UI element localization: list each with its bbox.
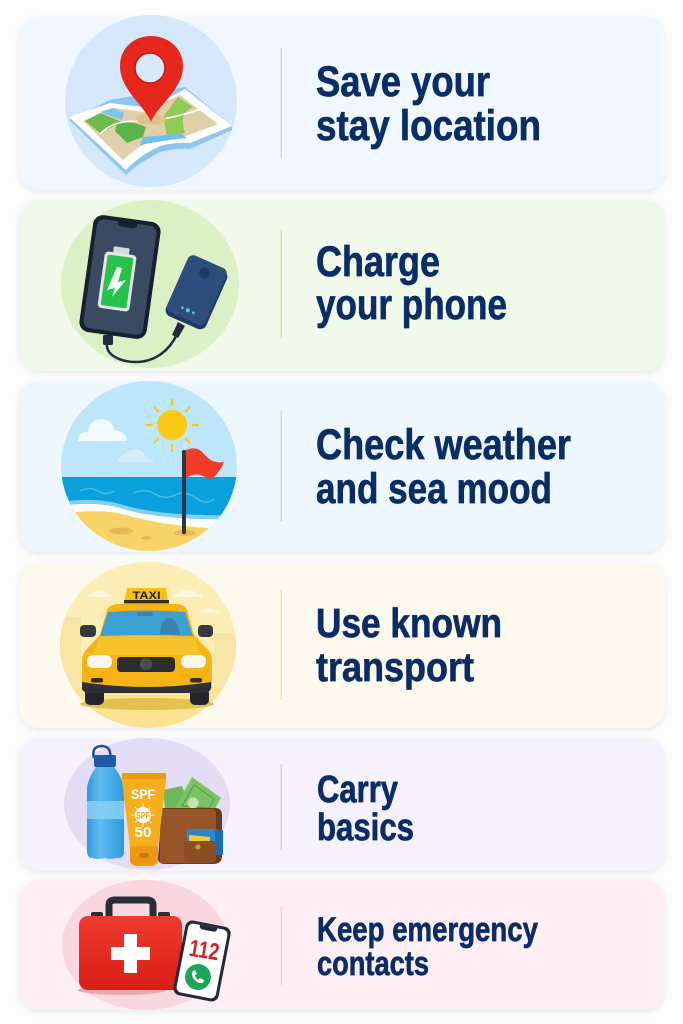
icon: phone and power bank xyxy=(61,200,239,368)
heading: Check weather xyxy=(316,421,571,469)
red flag xyxy=(182,448,224,534)
divider xyxy=(280,48,282,158)
icon: bottle, sunscreen and wallet xyxy=(64,738,230,870)
wallet xyxy=(158,808,223,864)
phone xyxy=(78,214,162,340)
heading xyxy=(316,58,541,150)
taxi roof sign: TAXI xyxy=(132,590,160,602)
panel: save your stay location xyxy=(19,15,665,190)
battery xyxy=(97,245,138,312)
panel: check weather and sea mood xyxy=(19,380,665,560)
heading xyxy=(316,421,571,513)
divider xyxy=(280,590,282,700)
clouds xyxy=(78,419,127,441)
heading xyxy=(317,911,538,983)
panel: keep emergency contacts xyxy=(19,880,665,1010)
power bank xyxy=(163,253,230,332)
panel: carry basics xyxy=(19,738,665,871)
icon: beach with sun and red flag xyxy=(60,380,240,560)
heading: transport xyxy=(316,644,474,690)
taxi roof sign xyxy=(124,588,169,604)
phone showing 112: 112 xyxy=(187,935,221,966)
panel: charge your phone xyxy=(19,200,665,371)
icon: yellow taxi xyxy=(60,562,240,732)
heading: Save your xyxy=(316,58,490,106)
heading xyxy=(317,769,414,849)
panel: use known transport xyxy=(19,562,665,732)
sunscreen tube: 50 xyxy=(134,824,152,841)
cash xyxy=(163,777,221,812)
heading xyxy=(316,600,502,690)
water bottle xyxy=(87,746,124,859)
sunscreen tube: SPF xyxy=(136,811,150,822)
heading: your phone xyxy=(316,281,507,329)
icon: map and location pin xyxy=(65,15,237,187)
divider xyxy=(280,906,282,985)
heading: Keep emergency xyxy=(317,911,538,949)
sunscreen tube xyxy=(122,773,166,866)
first aid kit xyxy=(79,900,182,990)
divider xyxy=(280,764,282,850)
heading: Use known xyxy=(316,600,502,646)
sun xyxy=(146,399,199,452)
sunscreen tube: SPF xyxy=(131,786,155,802)
divider xyxy=(280,229,282,339)
heading xyxy=(316,238,507,329)
icon: first aid kit and phone xyxy=(62,880,232,1010)
heading: Carry xyxy=(317,769,398,811)
heading: basics xyxy=(317,807,414,849)
divider xyxy=(280,411,282,521)
phone showing 112 xyxy=(172,919,232,1003)
heading: stay location xyxy=(316,102,541,150)
heading: contacts xyxy=(317,945,429,983)
heading: and sea mood xyxy=(316,465,552,513)
heading: Charge xyxy=(316,238,440,286)
